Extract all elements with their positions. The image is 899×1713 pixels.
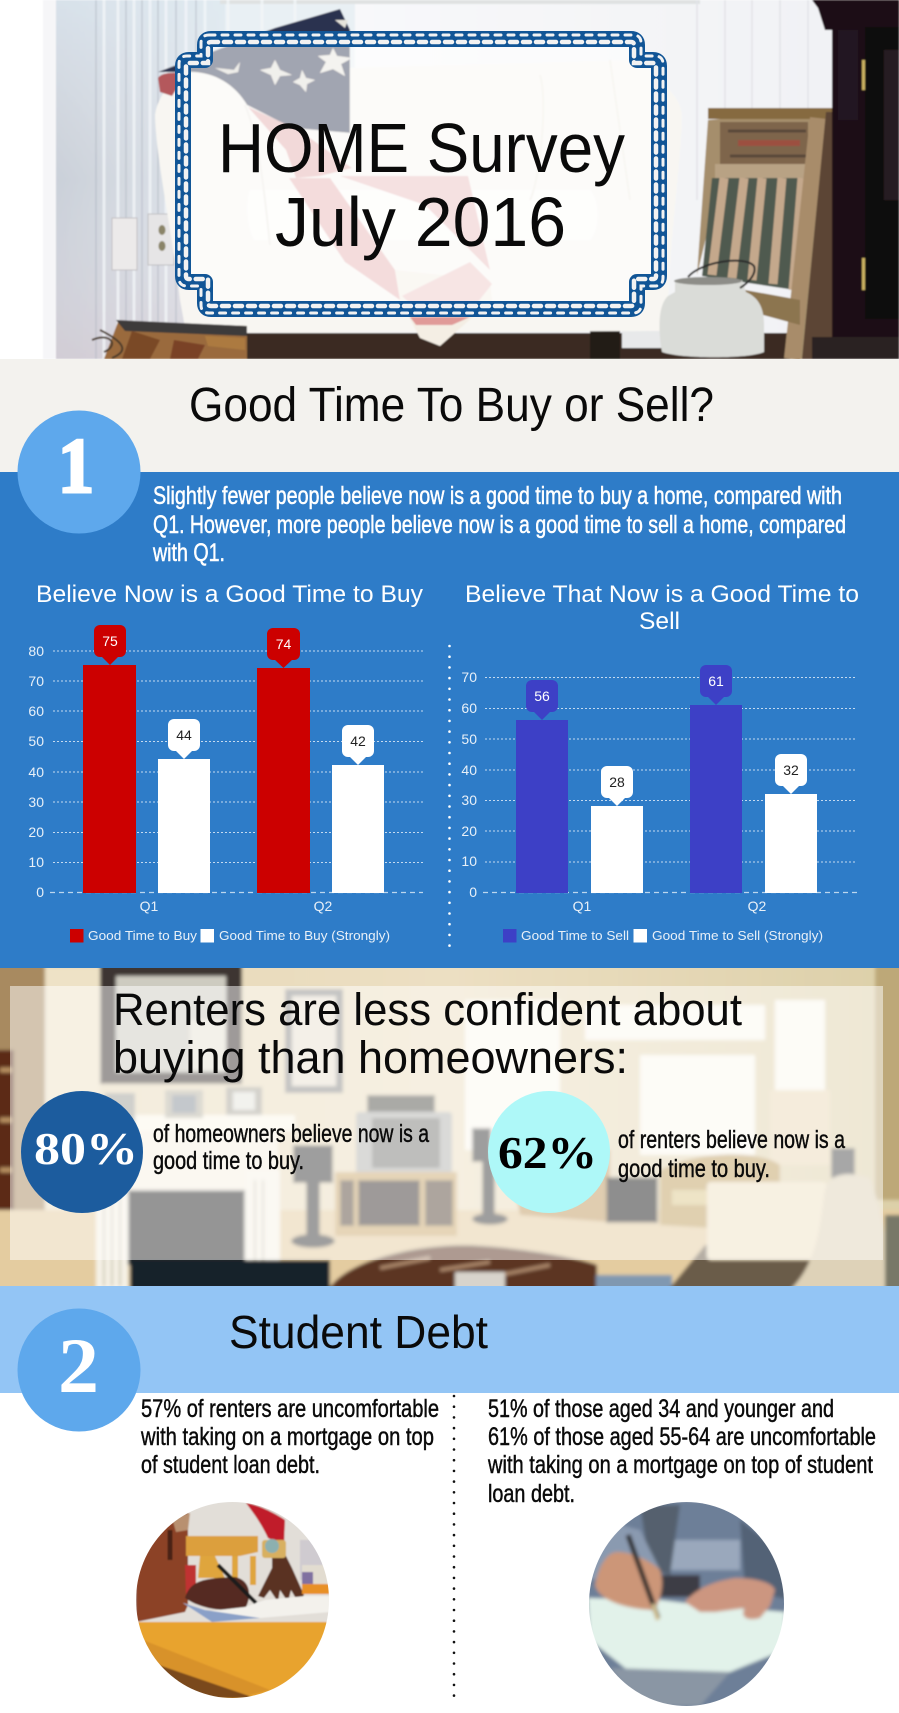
gridlines and y axis: 0	[36, 884, 44, 900]
legend	[503, 928, 823, 943]
legend: Good Time to Sell	[521, 928, 629, 943]
chart title: Sell	[639, 608, 680, 635]
gridlines and y axis: 40	[461, 762, 477, 778]
mirror	[100, 960, 242, 1084]
gridlines and y axis	[461, 669, 857, 900]
sofa and lamp	[668, 1174, 899, 1290]
gridlines and y axis: 70	[461, 669, 477, 685]
x axis labels	[573, 898, 767, 914]
circle badge: 62%	[498, 1127, 597, 1178]
gridlines and y axis: 10	[28, 854, 44, 870]
title	[223, 123, 625, 260]
text block: renters student debt: with taking on a mortgage on top	[140, 1423, 434, 1451]
gridlines and y axis: 20	[461, 823, 477, 839]
value callouts: 42	[350, 733, 366, 749]
panel: living room photo	[0, 960, 899, 1295]
text block: age groups student debt: loan debt.	[488, 1480, 575, 1508]
value callouts: 61	[708, 673, 724, 689]
boots	[92, 320, 247, 359]
value callouts: 56	[534, 688, 550, 704]
photo: hands signing at wooden table	[130, 1500, 335, 1700]
value callouts	[94, 625, 374, 765]
x axis labels: Q2	[748, 898, 767, 914]
text block: renters student debt: 57% of renters are uncomfortable	[141, 1395, 439, 1423]
caption	[618, 1126, 845, 1183]
tv and stand	[335, 1095, 457, 1236]
armchair	[155, 60, 682, 333]
badge: number 2	[18, 1308, 140, 1432]
gridlines and y axis: 30	[461, 792, 477, 808]
title: HOME Survey	[218, 109, 625, 187]
gridlines and y axis	[28, 643, 423, 900]
gridlines and y axis: 60	[28, 703, 44, 719]
wall outlets	[112, 214, 174, 270]
value callouts: 32	[783, 762, 799, 778]
heading: student debt: Student Debt	[229, 1306, 488, 1358]
text block: renters student debt: of student loan debt.	[141, 1451, 320, 1479]
caption: of homeowners believe now is a	[153, 1120, 429, 1148]
circle badge: 80%	[34, 1123, 138, 1174]
badge: number 2: 2	[58, 1322, 99, 1409]
gridlines and y axis: 80	[28, 643, 44, 659]
text block: section 1 summary	[152, 482, 846, 567]
value callouts: 28	[609, 774, 625, 790]
gridlines and y axis: 30	[28, 794, 44, 810]
panel: header photo of white armchair with flag	[0, 0, 899, 359]
gridlines and y axis: 40	[28, 764, 44, 780]
washboard	[697, 108, 832, 359]
photo: hand writing with pen on paper	[585, 1500, 790, 1710]
legend: Good Time to Sell (Strongly)	[652, 928, 823, 943]
gridlines and y axis: 10	[461, 853, 477, 869]
heading: renters less confident: Renters are less confident about	[113, 984, 742, 1035]
panel: blue chart section	[0, 472, 899, 968]
gridlines and y axis: 20	[28, 824, 44, 840]
circle badge	[21, 1091, 143, 1213]
mantel and fireplace	[94, 1086, 333, 1286]
gridlines and y axis: 50	[461, 731, 477, 747]
x axis labels: Q1	[573, 898, 592, 914]
side furniture	[510, 1150, 780, 1232]
circle badge	[488, 1091, 610, 1213]
x axis labels: Q1	[140, 898, 159, 914]
bars	[516, 705, 817, 893]
text block: renters student debt	[140, 1395, 439, 1479]
chart title	[465, 581, 859, 635]
chart title: Believe That Now is a Good Time to	[465, 581, 859, 608]
gridlines and y axis: 0	[469, 884, 477, 900]
panel: translucent overlay	[10, 986, 883, 1260]
bars	[83, 665, 384, 893]
ottoman	[328, 1245, 597, 1290]
value callouts	[526, 665, 807, 806]
panel: section 1 heading band	[0, 359, 899, 472]
stat: 62 percent of renters	[488, 1091, 845, 1213]
wall picture	[285, 989, 343, 1093]
value callouts: 75	[102, 633, 118, 649]
chart: believe that now is a good time to sell	[461, 581, 859, 943]
caption: good time to buy.	[618, 1155, 770, 1183]
heading: renters less confident: buying than homeowners:	[113, 1032, 628, 1083]
gridlines and y axis: 50	[28, 733, 44, 749]
heading: Good Time To Buy or Sell: Good Time To Buy or Sell?	[189, 379, 714, 432]
legend	[70, 928, 390, 943]
windows	[465, 1000, 830, 1165]
value callouts: 44	[176, 727, 192, 743]
decorative frame with title plate	[179, 35, 663, 313]
x axis labels: Q2	[314, 898, 333, 914]
chart title: Believe Now is a Good Time to Buy	[36, 581, 423, 608]
caption: good time to buy.	[153, 1147, 304, 1175]
value callouts: 74	[276, 636, 291, 652]
jar	[660, 261, 764, 357]
text block: age groups student debt	[487, 1395, 876, 1508]
legend: Good Time to Buy (Strongly)	[219, 928, 390, 943]
legend: Good Time to Buy	[88, 928, 198, 943]
heading: renters less confident	[113, 984, 742, 1083]
title: July 2016	[275, 183, 566, 261]
gridlines and y axis: 60	[461, 700, 477, 716]
badge: number 1: 1	[58, 422, 94, 509]
text block: section 1 summary: with Q1.	[152, 539, 225, 567]
chart: believe now is a good time to buy	[28, 581, 423, 943]
stat: 80 percent of homeowners	[21, 1091, 429, 1213]
x axis labels	[140, 898, 333, 914]
badge: number 1	[18, 410, 140, 534]
gridlines and y axis: 70	[28, 673, 44, 689]
cabinet	[812, 0, 899, 359]
panel: section 2 band	[0, 1286, 899, 1393]
speakers	[291, 1128, 855, 1248]
flag	[158, 9, 492, 346]
caption	[153, 1120, 429, 1175]
